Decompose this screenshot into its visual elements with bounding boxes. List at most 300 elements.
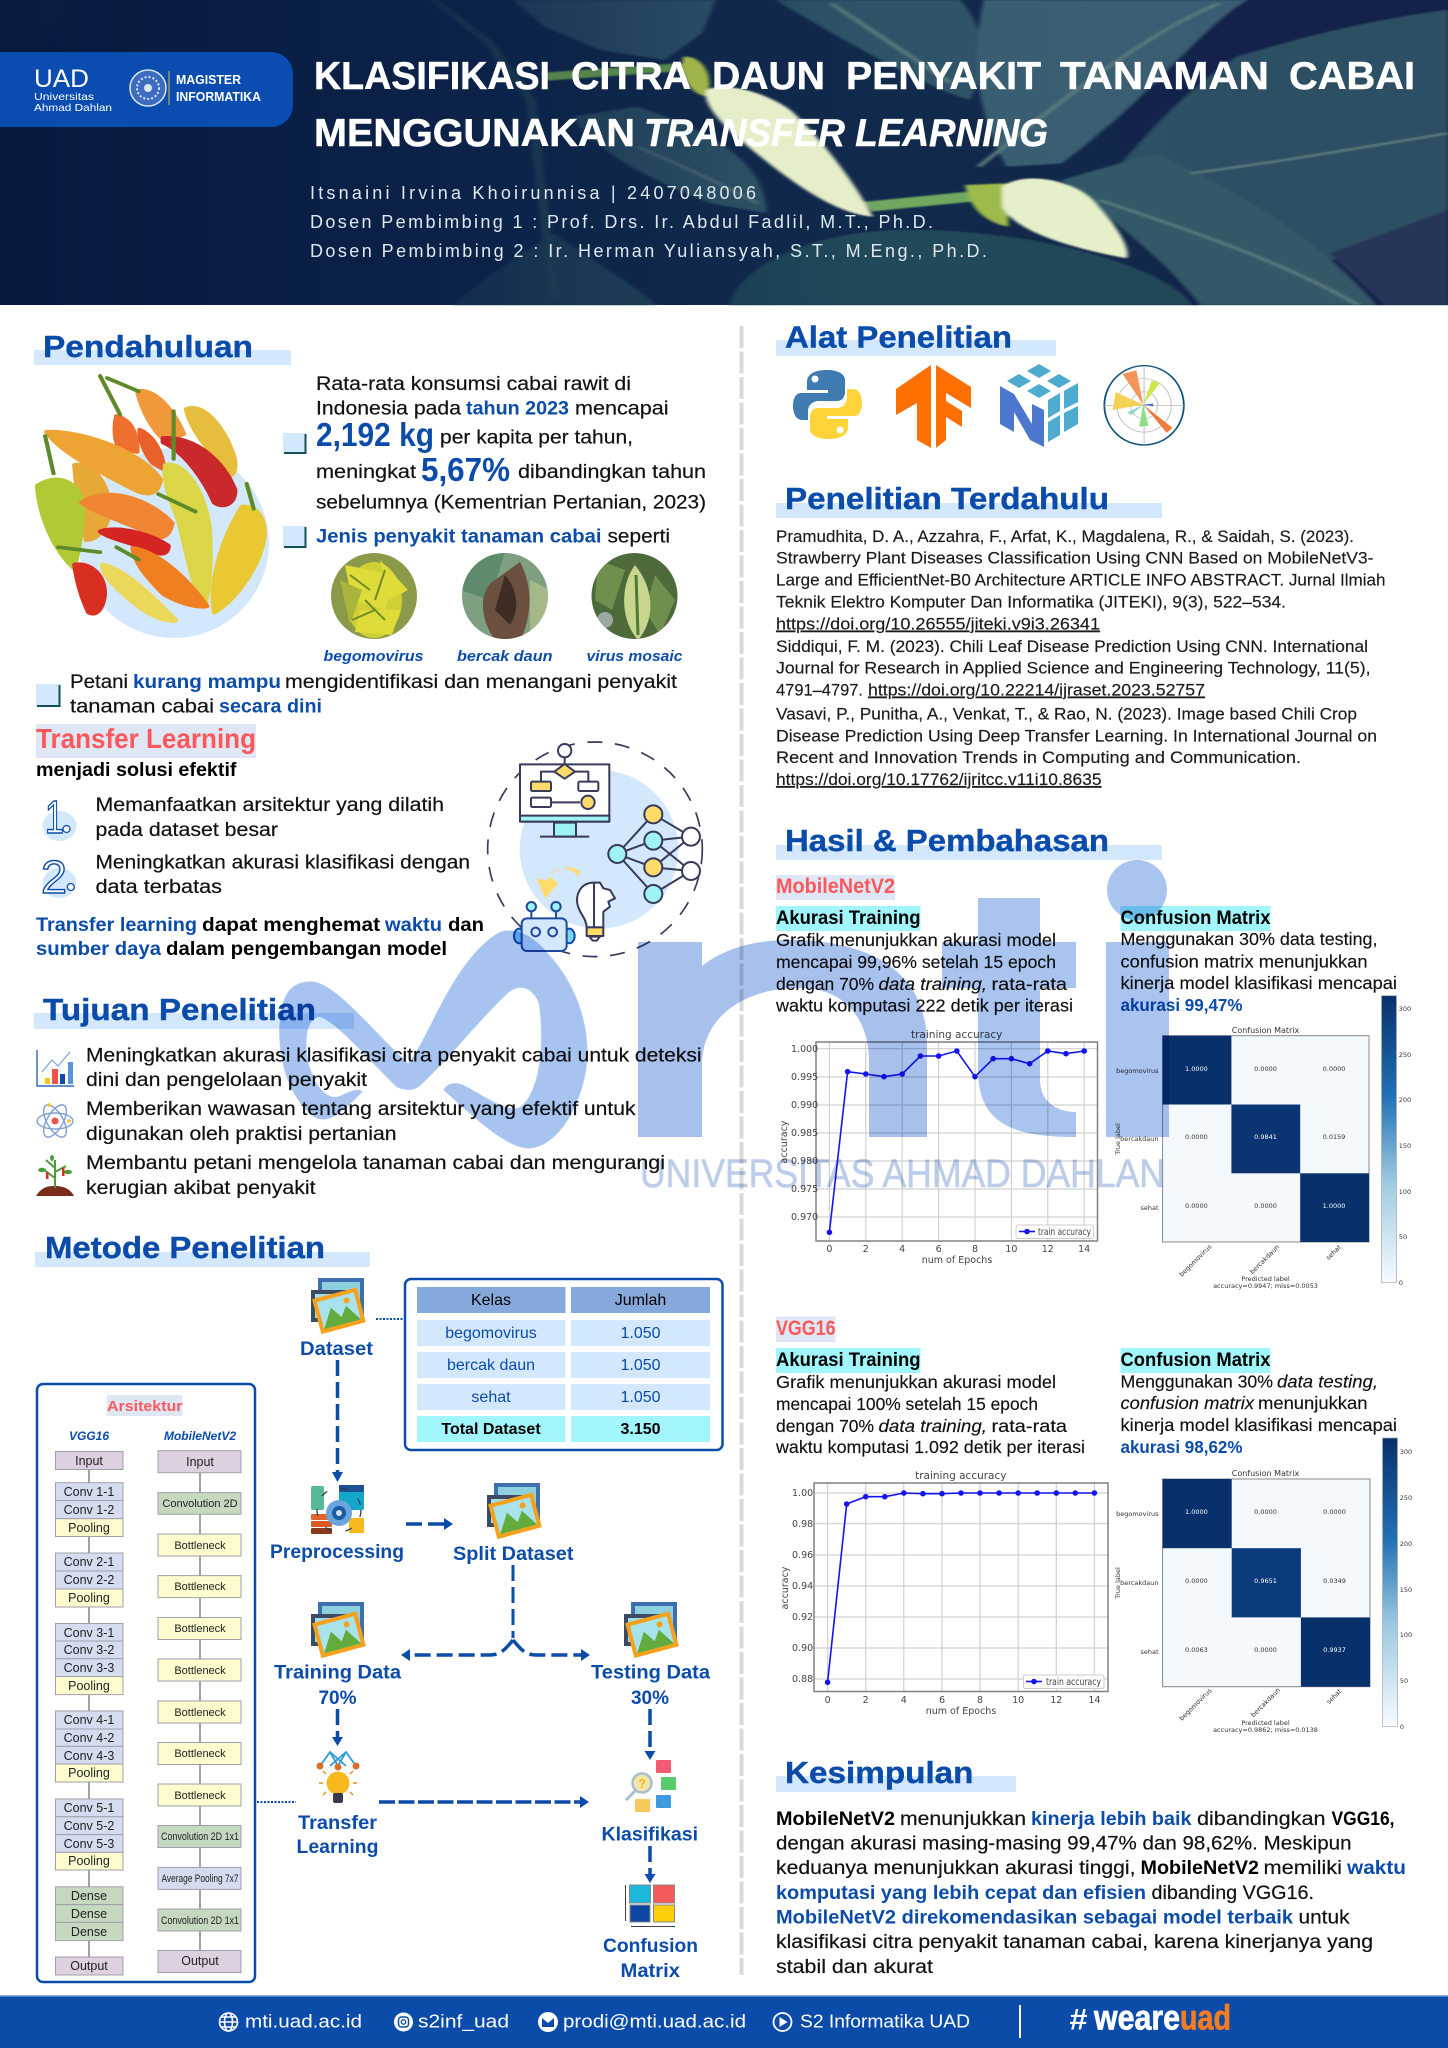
- chart: mobilenet confusion matrix: 0.0000: [1254, 1202, 1277, 1210]
- icon: play: [774, 2013, 792, 2031]
- table: dataset: sehat: [471, 1389, 511, 1406]
- icon: klasifikasi: ?: [638, 1776, 646, 1791]
- text: conclusion: MobileNetV2: [1140, 1858, 1259, 1879]
- chart: vgg16 training accuracy: 2: [863, 1695, 869, 1706]
- hashtag: weare: [1093, 1998, 1180, 2038]
- column: MobileNetV2: [158, 1451, 241, 1972]
- reference 2: 4791–4797.: [776, 680, 863, 700]
- column labels: VGG16: Dense: [71, 1907, 107, 1921]
- chart: mobilenet confusion matrix: 0.0000: [1323, 1065, 1345, 1073]
- label: testing data: [591, 1662, 710, 1709]
- chart: vgg16 training accuracy: 6: [939, 1695, 945, 1706]
- column labels: MobileNetV2: Bottleneck: [174, 1540, 226, 1552]
- text: consumption fact: 2,192 kg: [316, 416, 434, 453]
- text: farmer problem: mengidentifikasi dan menangani penyakit: [285, 672, 678, 693]
- text: mobilenet confusion matrix: kinerja model klasifikasi mencapai: [1120, 973, 1397, 993]
- label: confusion matrix: Matrix: [620, 1961, 680, 1982]
- chart: vgg16 confusion matrix: 0.9937: [1323, 1646, 1346, 1654]
- heading: kesimpulan: [776, 1755, 1016, 1792]
- heading: hasil dan pembahasan: Hasil & Pembahasan: [785, 823, 1109, 858]
- chart: vgg16 training accuracy: 0.92: [792, 1612, 813, 1623]
- icon: atom: [37, 1101, 73, 1141]
- text: objective 3: kerugian akibat penyakit: [86, 1178, 316, 1199]
- illustration: transfer learning: [488, 742, 702, 957]
- text: objective 2: Memberikan wawasan tentang arsitektur yang efektif untuk: [86, 1099, 636, 1120]
- label: dataset: Dataset: [300, 1339, 374, 1360]
- column labels: VGG16: Conv 2-1: [64, 1555, 114, 1569]
- list: numbered benefits: Memanfaatkan arsitektur yang dilatih: [96, 795, 444, 816]
- text: vgg16 confusion matrix: data testing,: [1277, 1372, 1378, 1392]
- icon: preprocessing: [311, 1485, 364, 1534]
- text: channel: S2 Informatika UAD: [800, 2012, 970, 2032]
- text: consumption fact: tahun 2023: [466, 398, 569, 420]
- chart: mobilenet training accuracy: 0: [826, 1244, 832, 1255]
- heading: transfer learning: menjadi solusi efektif: [36, 760, 237, 781]
- photo: begomovirus: [330, 552, 420, 642]
- text: vgg16 training accuracy: mencapai 100% setelah 15 epoch: [776, 1394, 1038, 1414]
- column labels: VGG16: Conv 5-3: [64, 1837, 114, 1851]
- table: dataset: Jumlah: [615, 1292, 666, 1309]
- list: numbered benefits: 1: [45, 791, 64, 843]
- icon: confusion matrix: [626, 1885, 675, 1926]
- text: farmer problem: secara dini: [219, 696, 322, 718]
- text: disease types: seperti: [608, 526, 670, 548]
- chart: vgg16 confusion matrix: Predicted label: [1241, 1719, 1290, 1727]
- chart: mobilenet training accuracy: 4: [899, 1244, 905, 1255]
- bullet: [283, 526, 306, 547]
- heading: kesimpulan: Kesimpulan: [785, 1755, 974, 1790]
- chart: mobilenet confusion matrix: 0.0000: [1185, 1202, 1208, 1210]
- column labels: MobileNetV2: Output: [181, 1954, 219, 1968]
- reference 1: [776, 527, 1386, 634]
- icon: dataset: [311, 1278, 366, 1334]
- text: vgg16 confusion matrix: Menggunakan 30%: [1120, 1372, 1273, 1392]
- heading: alat penelitian: Alat Penelitian: [785, 320, 1012, 354]
- watermark: mti logo: [279, 860, 1169, 1196]
- label: transfer learning: Transfer: [298, 1813, 378, 1834]
- chart: mobilenet confusion matrix: 0.0000: [1254, 1065, 1277, 1073]
- watermark: mti logo: UNIVERSITAS AHMAD DAHLAN: [640, 1152, 1165, 1196]
- chart: mobilenet confusion matrix: 100: [1399, 1188, 1411, 1196]
- text: consumption fact: 5,67%: [421, 451, 510, 488]
- column labels: MobileNetV2: Bottleneck: [174, 1623, 226, 1635]
- chart: mobilenet confusion matrix: begomovirus: [1116, 1067, 1159, 1075]
- text: mobilenet training accuracy: dengan 70%: [776, 974, 874, 994]
- chart: vgg16 confusion matrix: True label: [1114, 1567, 1122, 1600]
- chart: vgg16 confusion matrix: 0.0000: [1323, 1508, 1346, 1516]
- column labels: MobileNetV2: Bottleneck: [174, 1581, 226, 1593]
- chart: vgg16 confusion matrix: 250: [1400, 1494, 1412, 1502]
- heading: transfer learning: Transfer Learning: [36, 723, 256, 754]
- logo badge: INFORMATIKA: [176, 90, 261, 104]
- chart: mobilenet confusion matrix: Predicted label: [1241, 1275, 1290, 1283]
- reference 2: Journal for Research in Applied Science and Engineering Technology, 11(5),: [776, 658, 1370, 678]
- chart: vgg16 training accuracy: training accuracy: [915, 1470, 1006, 1482]
- chart: vgg16 confusion matrix: 0.9651: [1254, 1577, 1277, 1585]
- heading: pendahuluan: Pendahuluan: [43, 329, 253, 364]
- logo badge: Universitas: [34, 91, 94, 103]
- table: dataset: [405, 1279, 722, 1450]
- chart: vgg16 confusion matrix: 0.0000: [1254, 1508, 1277, 1516]
- chart: mobilenet confusion matrix: 250: [1399, 1051, 1411, 1059]
- text: objective 1: dini dan pengelolaan penyakit: [86, 1070, 368, 1091]
- author and supervisors: Dosen Pembimbing 2 : Ir. Herman Yuliansyah, S.T., M.Eng., Ph.D.: [310, 241, 987, 261]
- text: mobilenet training accuracy: Akurasi Training: [776, 908, 920, 929]
- chart: vgg16 confusion matrix: bercakdaun: [1120, 1579, 1158, 1587]
- chart: vgg16 confusion matrix: [1114, 1438, 1412, 1734]
- table: dataset: 1.050: [620, 1389, 661, 1406]
- column labels: VGG16: Conv 4-3: [64, 1749, 114, 1763]
- chart: mobilenet confusion matrix: 150: [1399, 1142, 1411, 1150]
- text: objective 2: [86, 1099, 636, 1145]
- column labels: VGG16: [64, 1454, 114, 1973]
- icon: training data: [311, 1602, 366, 1658]
- text: farmer problem: [70, 672, 678, 718]
- text: consumption fact: Indonesia pada: [316, 398, 461, 420]
- list: numbered benefits: pada dataset besar: [96, 820, 279, 841]
- chart: mobilenet training accuracy: num of Epochs: [922, 1255, 992, 1266]
- heading: transfer learning: [36, 723, 256, 781]
- text: conclusion: klasifikasi citra penyakit tanaman cabai, karena kinerjanya yang: [776, 1932, 1373, 1953]
- author and supervisors: [310, 183, 987, 261]
- panel: arsitektur: [37, 1384, 255, 1982]
- text: conclusion: untuk: [1298, 1908, 1350, 1928]
- column labels: VGG16: Conv 3-3: [64, 1661, 114, 1675]
- reference 3: Disease Prediction Using Deep Transfer Learning. In International Journal on: [776, 726, 1377, 746]
- text: mobilenet training accuracy: rata-rata: [992, 974, 1067, 994]
- column labels: MobileNetV2: Bottleneck: [174, 1790, 226, 1802]
- chart: vgg16 training accuracy: 10: [1012, 1695, 1024, 1706]
- chart: mobilenet training accuracy: 1.000: [791, 1044, 818, 1055]
- chart: vgg16 training accuracy: 8: [977, 1695, 983, 1706]
- text: disease types: Jenis penyakit tanaman cabai: [316, 526, 602, 548]
- text: conclusion: dibandingkan: [1197, 1809, 1326, 1830]
- logo badge: [0, 52, 293, 127]
- text: objective 2: digunakan oleh praktisi pertanian: [86, 1124, 396, 1145]
- text: email: prodi@mti.uad.ac.id: [563, 2012, 746, 2032]
- chart: mobilenet training accuracy: 2: [863, 1244, 869, 1255]
- chart: vgg16 confusion matrix: 150: [1400, 1586, 1412, 1594]
- text: conclusion: [776, 1809, 1406, 1978]
- chart: mobilenet confusion matrix: 300: [1399, 1005, 1411, 1013]
- chart: vgg16 training accuracy: 0.88: [792, 1674, 813, 1685]
- text: mobilenet confusion matrix: [1120, 906, 1397, 1015]
- chart: mobilenet training accuracy: 0.975: [791, 1184, 818, 1195]
- column labels: VGG16: Pooling: [68, 1591, 110, 1605]
- column labels: MobileNetV2: Bottleneck: [174, 1748, 226, 1760]
- chart: mobilenet training accuracy: 14: [1078, 1244, 1090, 1255]
- text: transfer learning benefit: dalam pengembangan model: [166, 939, 447, 960]
- chart: mobilenet confusion matrix: accuracy=0.9947; miss=0.0053: [1213, 1282, 1318, 1290]
- icon: transfer learning: [316, 1752, 360, 1803]
- chart: vgg16 training accuracy: 0.94: [792, 1581, 813, 1592]
- logo badge: UAD: [34, 65, 89, 93]
- list: numbered benefits: data terbatas: [96, 877, 222, 898]
- author and supervisors: Dosen Pembimbing 1 : Prof. Drs. Ir. Abdul Fadlil, M.T., Ph.D.: [310, 212, 933, 232]
- column labels: VGG16: Conv 4-1: [64, 1713, 114, 1727]
- connector lines: [89, 1470, 200, 1957]
- reference 2: [776, 637, 1370, 700]
- chart: vgg16 training accuracy: 0.96: [792, 1550, 813, 1561]
- text: transfer learning benefit: dapat menghemat: [202, 915, 381, 936]
- title: KLASIFIKASI: [314, 55, 550, 98]
- column labels: VGG16: Dense: [71, 1925, 107, 1939]
- table: dataset: begomovirus: [445, 1325, 537, 1342]
- hashtag: uad: [1180, 1998, 1231, 2038]
- chart: mobilenet confusion matrix: begomovirus: [1178, 1242, 1214, 1278]
- column labels: VGG16: Conv 2-2: [64, 1573, 114, 1587]
- table: dataset: 1.050: [620, 1357, 661, 1374]
- text: vgg16 training accuracy: data training,: [878, 1416, 987, 1436]
- illustration: chili peppers: [37, 376, 269, 638]
- logo badge: Ahmad Dahlan: [34, 102, 112, 114]
- icon: chili plant: [36, 1155, 74, 1196]
- text: conclusion: keduanya menunjukkan akurasi tinggi,: [776, 1858, 1136, 1879]
- chart: mobilenet confusion matrix: 0.0159: [1323, 1133, 1345, 1141]
- chart: mobilenet training accuracy: 0.980: [791, 1156, 818, 1167]
- title: CITRA: [571, 55, 691, 98]
- chart: vgg16 confusion matrix: accuracy=0.9862; miss=0.0138: [1213, 1726, 1318, 1734]
- chart: vgg16 confusion matrix: 0.0000: [1254, 1646, 1277, 1654]
- label: confusion matrix: [603, 1936, 698, 1982]
- text: consumption fact: Rata-rata konsumsi cabai rawit di: [316, 374, 631, 395]
- author and supervisors: Itsnaini Irvina Khoirunnisa | 2407048006: [310, 183, 756, 203]
- text: conclusion: VGG16,: [1332, 1809, 1394, 1830]
- reference 2: Siddiqui, F. M. (2023). Chili Leaf Disease Prediction Using CNN. International: [776, 637, 1368, 656]
- text: vgg16 confusion matrix: confusion matrix: [1120, 1393, 1255, 1413]
- chart: vgg16 confusion matrix: 0.0349: [1323, 1577, 1346, 1585]
- table: dataset: Kelas: [471, 1292, 511, 1309]
- list: numbered benefits: [41, 791, 470, 903]
- chart: vgg16 training accuracy: 12: [1050, 1695, 1062, 1706]
- arrow: klasifikasi to confusion matrix: [644, 1846, 656, 1883]
- divider: [1019, 2005, 1021, 2038]
- panel: arsitektur: MobileNetV2: [164, 1429, 236, 1443]
- text: mobilenet training accuracy: data training,: [878, 974, 987, 994]
- disease labels: bercak daun: [457, 648, 552, 665]
- chart: vgg16 training accuracy: 0: [825, 1695, 831, 1706]
- reference 3: Vasavi, P., Punitha, A., Venkat, T., & Rao, N. (2023). Image based Chili Crop: [776, 704, 1357, 724]
- chart: mobilenet confusion matrix: bercakdaun: [1120, 1135, 1158, 1143]
- disease labels: [324, 648, 683, 665]
- heading: metode penelitian: Metode Penelitian: [45, 1230, 325, 1265]
- text: farmer problem: tanaman cabai: [70, 696, 214, 718]
- chart: mobilenet training accuracy: [779, 1029, 1098, 1266]
- chart: vgg16 training accuracy: 4: [901, 1695, 907, 1706]
- title: CABAI: [1289, 55, 1415, 98]
- chart: mobilenet training accuracy: 0.970: [791, 1212, 818, 1223]
- table: dataset: bercak daun: [447, 1357, 535, 1374]
- hashtag: #: [1070, 2004, 1088, 2036]
- chart: vgg16 confusion matrix: begomovirus: [1116, 1510, 1159, 1518]
- chart: mobilenet confusion matrix: Confusion Matrix: [1232, 1026, 1300, 1035]
- column labels: VGG16: Conv 3-2: [64, 1643, 114, 1657]
- icon: web: [220, 2013, 238, 2031]
- column: VGG16: [56, 1452, 123, 1975]
- column labels: MobileNetV2: Input: [186, 1455, 214, 1469]
- column labels: MobileNetV2: Bottleneck: [174, 1707, 226, 1719]
- chart: mobilenet training accuracy: accuracy: [779, 1120, 790, 1163]
- chart: vgg16 confusion matrix: 200: [1400, 1540, 1412, 1548]
- text: consumption fact: dibandingkan tahun: [518, 462, 706, 483]
- list: numbered benefits: 2: [41, 851, 67, 903]
- chart: mobilenet confusion matrix: 0: [1399, 1279, 1403, 1287]
- arrow: dataset to preprocessing: [332, 1360, 343, 1482]
- text: vgg16 confusion matrix: menunjukkan: [1258, 1393, 1368, 1413]
- column labels: MobileNetV2: Convolution 2D: [162, 1498, 238, 1510]
- label: testing data: 30%: [631, 1688, 669, 1709]
- column labels: VGG16: Pooling: [68, 1679, 110, 1693]
- text: farmer problem: Petani: [70, 672, 128, 693]
- chart: mobilenet training accuracy: 0.995: [791, 1072, 818, 1083]
- text: conclusion: menunjukkan: [900, 1809, 1026, 1830]
- text: mobilenet training accuracy: [775, 906, 1073, 1016]
- table: dataset: 1.050: [620, 1325, 661, 1342]
- text: consumption fact: [316, 374, 706, 514]
- column labels: VGG16: Pooling: [68, 1521, 110, 1535]
- chart: vgg16 training accuracy: 0.98: [792, 1519, 813, 1530]
- header banner: [0, 0, 1448, 305]
- icon: klasifikasi: [626, 1760, 676, 1812]
- chart: vgg16 training accuracy: 0.90: [792, 1643, 813, 1654]
- text: objective 3: Membantu petani mengelola tanaman cabai dan mengurangi: [86, 1153, 665, 1174]
- chart: vgg16 training accuracy: [780, 1470, 1108, 1717]
- chart: mobilenet training accuracy: 6: [936, 1244, 942, 1255]
- column labels: VGG16: Pooling: [68, 1766, 110, 1780]
- icon: testing data: [624, 1602, 679, 1658]
- chart: vgg16 confusion matrix: sehat: [1325, 1687, 1344, 1706]
- text: vgg16 confusion matrix: [1120, 1348, 1397, 1457]
- panel: alat penelitian: [776, 320, 1184, 448]
- text: conclusion: memiliki: [1264, 1858, 1342, 1879]
- arrow: transfer learning to klasifikasi: [379, 1796, 589, 1808]
- chart: mobilenet confusion matrix: 1.0000: [1185, 1065, 1208, 1073]
- title: [314, 55, 1415, 155]
- text: mobilenet training accuracy: mencapai 99,96% setelah 15 epoch: [776, 952, 1056, 972]
- chart: vgg16 confusion matrix: 0.0063: [1185, 1646, 1208, 1654]
- chart: mobilenet confusion matrix: sehat: [1324, 1243, 1343, 1262]
- text: conclusion: MobileNetV2 direkomendasikan sebagai model terbaik: [776, 1908, 1293, 1928]
- column labels: VGG16: Conv 3-1: [64, 1626, 114, 1640]
- column labels: VGG16: Conv 4-2: [64, 1731, 114, 1745]
- text: instagram: s2inf_uad: [418, 2012, 509, 2032]
- label: testing data: Testing Data: [591, 1662, 710, 1684]
- text: mobilenet confusion matrix: Menggunakan 30% data testing,: [1120, 929, 1378, 949]
- reference 3: https://doi.org/10.17762/ijritcc.v11i10.8635: [776, 770, 1102, 789]
- reference 1: Teknik Elektro Komputer Dan Informatika (JITEKI), 9(3), 522–534.: [776, 592, 1286, 612]
- chart: vgg16 confusion matrix: 0: [1400, 1723, 1404, 1731]
- text: vgg16 training accuracy: [775, 1348, 1085, 1457]
- chart: mobilenet confusion matrix: bercakdaun: [1248, 1243, 1281, 1276]
- arrow: split branches: [401, 1565, 590, 1661]
- chart: mobilenet training accuracy: training accuracy: [911, 1029, 1002, 1041]
- text: transfer learning benefit: dan: [448, 915, 484, 936]
- chart: vgg16 training accuracy: num of Epochs: [926, 1706, 996, 1717]
- text: consumption fact: meningkat: [316, 462, 417, 483]
- chart: vgg16 training accuracy: 14: [1088, 1695, 1100, 1706]
- chart: mobilenet confusion matrix: 0.0000: [1185, 1133, 1208, 1141]
- text: consumption fact: sebelumnya (Kementrian Pertanian, 2023): [316, 492, 706, 514]
- list: numbered benefits: Meningkatkan akurasi klasifikasi dengan: [96, 852, 470, 874]
- text: objective 1: [86, 1046, 702, 1091]
- chart: vgg16 confusion matrix: Confusion Matrix: [1232, 1469, 1300, 1478]
- chart: vgg16 confusion matrix: bercakdaun: [1249, 1686, 1282, 1719]
- bullet: [36, 684, 60, 706]
- chart: mobilenet confusion matrix: [1114, 996, 1411, 1290]
- label: confusion matrix: Confusion: [603, 1936, 698, 1957]
- chart: mobilenet training accuracy: 10: [1005, 1244, 1017, 1255]
- subheading: mobilenetv2: MobileNetV2: [776, 875, 895, 898]
- icon: matplotlib: [1104, 366, 1184, 445]
- connector: dataset to table: [376, 1318, 404, 1320]
- chart: mobilenet confusion matrix: sehat: [1140, 1204, 1159, 1212]
- logo badge: MAGISTER: [176, 73, 241, 87]
- arrow: preprocessing to split: [406, 1518, 453, 1530]
- text: mobilenet confusion matrix: Confusion Matrix: [1120, 908, 1271, 929]
- column labels: MobileNetV2: Average Pooling 7x7: [162, 1873, 238, 1885]
- text: transfer learning benefit: waktu: [384, 915, 442, 936]
- text: conclusion: MobileNetV2: [776, 1809, 895, 1830]
- chart: mobilenet training accuracy: 0.990: [791, 1100, 818, 1111]
- heading: penelitian terdahulu: Penelitian Terdahulu: [785, 481, 1109, 516]
- subheading: vgg16: VGG16: [776, 1317, 836, 1340]
- column labels: VGG16: Input: [75, 1454, 103, 1468]
- text: mobilenet training accuracy: Grafik menunjukkan akurasi model: [776, 930, 1056, 950]
- photo: virus mosaic: [590, 552, 680, 642]
- column labels: VGG16: Output: [70, 1959, 108, 1973]
- column labels: MobileNetV2: [161, 1455, 239, 1968]
- chart: mobilenet training accuracy: 0.985: [791, 1128, 818, 1139]
- column labels: MobileNetV2: Bottleneck: [174, 1665, 226, 1677]
- chart: mobilenet confusion matrix: 0.9841: [1254, 1133, 1277, 1141]
- table: dataset: Total Dataset: [441, 1421, 541, 1438]
- title: TANAMAN: [1060, 55, 1269, 98]
- arrow: training to transfer learning: [332, 1709, 343, 1746]
- disease labels: begomovirus: [324, 648, 424, 665]
- text: consumption fact: mencapai: [575, 398, 668, 420]
- connector: arsitektur to transfer learning: [257, 1801, 296, 1803]
- text: consumption fact: per kapita per tahun,: [440, 428, 633, 448]
- text: vgg16 confusion matrix: akurasi 98,62%: [1120, 1437, 1243, 1457]
- column labels: VGG16: Dense: [71, 1889, 107, 1903]
- reference 3: Recent and Innovation Trends in Computing and Communication.: [776, 748, 1301, 767]
- panel: metode penelitian: [35, 1230, 722, 1982]
- text: conclusion: waktu: [1346, 1858, 1406, 1879]
- chart: vgg16 training accuracy: train accuracy: [1046, 1677, 1101, 1688]
- panel: penelitian terdahulu: [776, 481, 1386, 789]
- label: transfer learning: Learning: [296, 1837, 378, 1858]
- text: mobilenet confusion matrix: confusion matrix menunjukkan: [1120, 952, 1368, 972]
- photo: bercak daun: [460, 552, 550, 642]
- text: mobilenet training accuracy: waktu komputasi 222 detik per iterasi: [775, 996, 1073, 1016]
- reference 1: Pramudhita, D. A., Azzahra, F., Arfat, K., Magdalena, R., & Saidah, S. (2023).: [776, 527, 1354, 546]
- label: training data: Training Data: [274, 1662, 401, 1684]
- title: PENYAKIT: [846, 55, 1041, 98]
- chart: vgg16 confusion matrix: begomovirus: [1178, 1686, 1214, 1722]
- title: TRANSFER LEARNING: [644, 112, 1048, 155]
- label: preprocessing: Preprocessing: [270, 1542, 404, 1563]
- chart: mobilenet confusion matrix: True label: [1114, 1123, 1122, 1156]
- icon: numpy: [1000, 364, 1078, 447]
- text: vgg16 confusion matrix: kinerja model klasifikasi mencapai: [1120, 1415, 1397, 1435]
- disease labels: virus mosaic: [586, 648, 683, 665]
- bullet: [283, 433, 306, 453]
- label: klasifikasi: Klasifikasi: [602, 1824, 698, 1846]
- chart: mobilenet confusion matrix: 1.0000: [1323, 1202, 1345, 1210]
- column divider: [740, 326, 744, 1975]
- column labels: VGG16: Conv 1-1: [64, 1485, 114, 1499]
- text: vgg16 confusion matrix: Confusion Matrix: [1120, 1350, 1271, 1371]
